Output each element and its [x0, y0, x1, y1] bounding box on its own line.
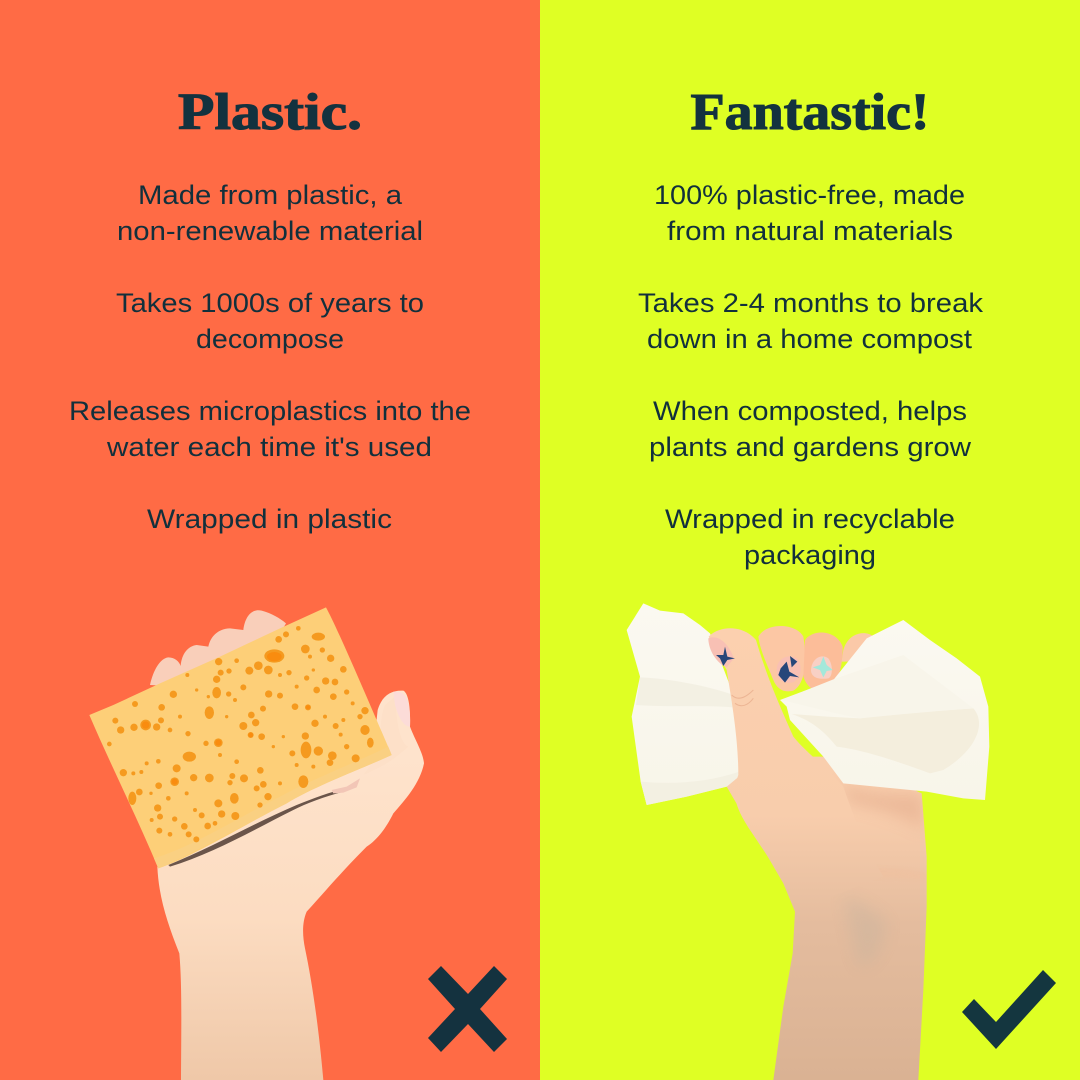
text: decomposition: Takes 1000s of years to [116, 288, 424, 318]
text: material [117, 180, 423, 246]
thumb [708, 628, 883, 910]
text: packaging: Wrapped in plastic [147, 504, 392, 534]
left lobe of sponge [627, 603, 741, 805]
text: decomposition: down in a home compost [647, 324, 973, 354]
text: decomposition: decompose [196, 324, 344, 354]
text: material: non-renewable material [117, 216, 423, 246]
icon: check mark [962, 970, 1056, 1049]
text: decomposition: Takes 2-4 months to break [638, 288, 984, 318]
fingers [758, 626, 873, 692]
text: decomposition [638, 288, 984, 354]
heading: Plastic.: Plastic. [178, 84, 362, 141]
text: packaging: packaging [744, 540, 876, 570]
text: microplastics: Releases microplastics into the [69, 396, 471, 426]
text: compost benefit: plants and gardens grow [649, 432, 972, 462]
panel: fantastic [540, 0, 1080, 1080]
heading: Fantastic!: Fantastic! [690, 84, 930, 141]
text: microplastics: water each time it's used [106, 432, 432, 462]
illustration: hand squeezing white compostable sponge [627, 603, 989, 1080]
panel: plastic [0, 0, 540, 1080]
text: packaging [665, 504, 955, 570]
text: material: 100% plastic-free, made [654, 180, 965, 210]
text: material: from natural materials [667, 216, 953, 246]
illustration: hand holding yellow plastic sponge [89, 607, 424, 1080]
text: material [654, 180, 965, 246]
text: packaging: Wrapped in recyclable [665, 504, 955, 534]
text: decomposition [116, 288, 424, 354]
text: microplastics [69, 396, 471, 462]
right flap of sponge [780, 620, 989, 800]
text: compost benefit [649, 396, 972, 462]
text: compost benefit: When composted, helps [653, 396, 967, 426]
icon: cross [428, 966, 507, 1052]
text: material: Made from plastic, a [138, 180, 403, 210]
